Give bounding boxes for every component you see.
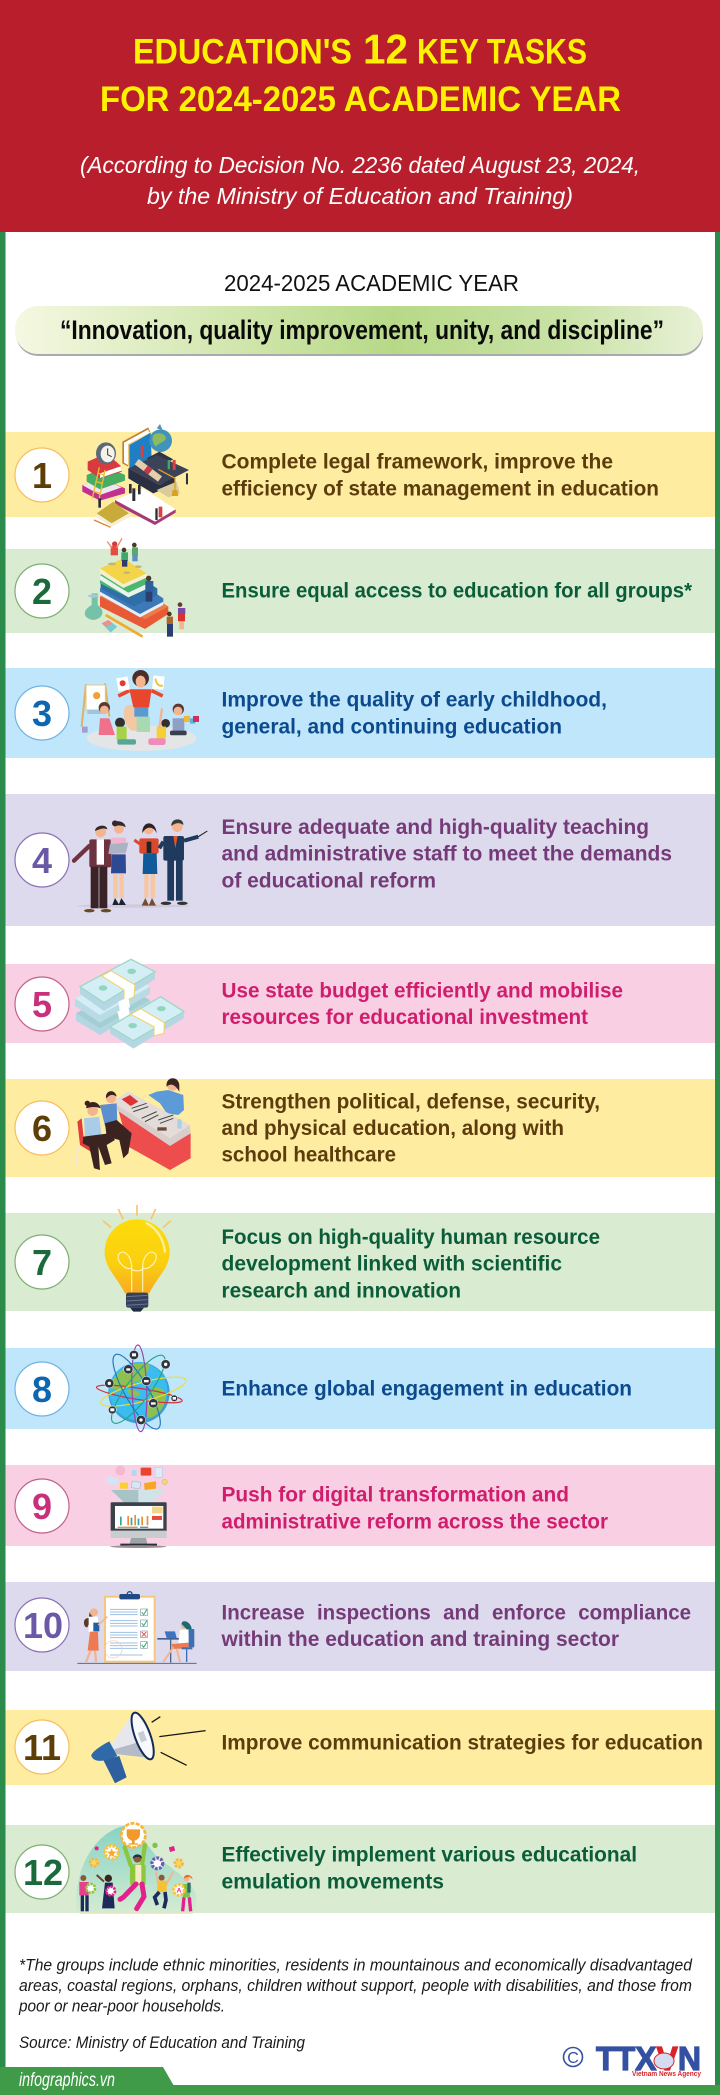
icon: teacher with children <box>82 670 199 751</box>
icon: megaphone <box>91 1710 206 1783</box>
number 3 <box>15 686 69 740</box>
site name: infographics.vn <box>19 2070 115 2091</box>
source: Source: Ministry of Education and Training <box>19 2033 305 2052</box>
footnote: poor or near-poor households. <box>18 1997 225 2016</box>
footnote <box>18 1956 693 2016</box>
subtitle: (According to Decision No. 2236 dated August 23, 2024, <box>80 152 640 178</box>
subtitle <box>80 152 640 209</box>
panel: task 2 <box>6 538 715 637</box>
task 9 text: Push for digital transformation and <box>222 1483 569 1507</box>
task 12 text <box>222 1843 637 1893</box>
panel: task 7 <box>6 1205 715 1312</box>
panel: task 3 <box>6 668 715 758</box>
task 6 text: school healthcare <box>222 1143 396 1167</box>
number 2: 2 <box>32 571 52 612</box>
number 5 <box>15 977 69 1031</box>
title <box>100 26 621 119</box>
task 10 text: within the education and training sector <box>221 1627 620 1651</box>
panel: task 8 <box>6 1345 715 1434</box>
panel: task 5 <box>6 959 715 1049</box>
task 4 text <box>222 815 672 892</box>
task 3 text <box>222 688 607 738</box>
panel: task 4 <box>6 794 715 926</box>
task 1 text: efficiency of state management in education <box>222 476 659 500</box>
number 4 <box>15 833 69 887</box>
task 9 text <box>222 1483 609 1533</box>
icon: stacks of money <box>75 959 184 1049</box>
task 6 text: and physical education, along with <box>222 1116 564 1140</box>
logo: TTXVN: C <box>567 2050 579 2067</box>
icon: students celebrating with trophy: A <box>177 1887 182 1894</box>
icon: light bulb <box>103 1205 171 1312</box>
task 9 text: administrative reform across the sector <box>222 1509 609 1533</box>
task 10 text: Increase inspections and enforce compliance <box>222 1600 691 1624</box>
logo: TTXVN: TTXVN <box>596 2040 701 2077</box>
task 7 text: Focus on high-quality human resource <box>222 1225 600 1249</box>
panel: task 11 <box>6 1710 715 1785</box>
number 1: 1 <box>32 455 52 496</box>
icon: stacked books and children <box>85 538 185 637</box>
logo: TTXVN: Vietnam News Agency <box>632 2069 702 2078</box>
title: 12 <box>363 26 408 72</box>
task 12 text: emulation movements <box>222 1869 444 1893</box>
panel: task 1 <box>6 424 715 527</box>
number 3: 3 <box>32 693 52 734</box>
icon: students celebrating with trophy <box>76 1823 197 1914</box>
icon: books, clock and globe <box>82 424 189 527</box>
number 5: 5 <box>32 984 52 1025</box>
icon: data funnel and monitor <box>107 1466 167 1548</box>
task 4 text: Ensure adequate and high-quality teaching <box>222 815 649 839</box>
number 8: 8 <box>32 1369 52 1410</box>
icon: four teachers <box>74 819 207 912</box>
number 2 <box>15 564 69 618</box>
task 7 text <box>222 1225 600 1302</box>
task 5 text: Use state budget efficiently and mobilise <box>222 978 623 1002</box>
task 1 text: Complete legal framework, improve the <box>222 450 613 474</box>
task 6 text <box>222 1089 600 1167</box>
task 1 text <box>222 450 659 500</box>
motto pill <box>15 306 703 356</box>
task 4 text: of educational reform <box>222 868 436 892</box>
task 3 text: Improve the quality of early childhood, <box>222 688 607 712</box>
number 6: 6 <box>32 1108 52 1149</box>
number 8 <box>15 1362 69 1416</box>
task 3 text: general, and continuing education <box>222 714 562 738</box>
panel: task 12 <box>6 1823 715 1914</box>
number 6 <box>15 1101 69 1155</box>
icon: people at a health desk <box>76 1078 191 1170</box>
number 9: 9 <box>32 1486 52 1527</box>
panel: task 10 <box>6 1582 715 1671</box>
icon: checklist with two women <box>77 1592 197 1663</box>
bottom bar with site tab <box>0 2067 720 2095</box>
title: FOR 2024-2025 ACADEMIC YEAR <box>100 80 621 119</box>
number 4: 4 <box>32 840 52 881</box>
number 7: 7 <box>32 1242 52 1283</box>
task 7 text: development linked with scientific <box>222 1252 562 1276</box>
subtitle: by the Ministry of Education and Training) <box>147 183 573 209</box>
task 5 text: resources for educational investment <box>222 1005 588 1029</box>
number 11: 11 <box>23 1727 61 1768</box>
right border <box>715 232 720 2095</box>
task 8 text: Enhance global engagement in education <box>222 1376 632 1400</box>
task 10 text <box>221 1600 691 1651</box>
title: KEY TASKS <box>417 32 587 72</box>
icon: globe with orbits <box>96 1345 188 1434</box>
left border <box>0 232 6 2095</box>
task 4 text: and administrative staff to meet the demands <box>222 842 672 866</box>
number 10: 10 <box>23 1605 63 1646</box>
task 7 text: research and innovation <box>222 1278 461 1302</box>
panel: task 6 <box>6 1078 715 1177</box>
number 10 <box>15 1598 69 1652</box>
task 12 text: Effectively implement various educational <box>222 1843 637 1867</box>
number 9 <box>15 1479 69 1533</box>
task 11 text: Improve communication strategies for education <box>222 1730 703 1754</box>
number 12: 12 <box>23 1852 63 1893</box>
title: EDUCATION'S <box>133 32 352 72</box>
number 11 <box>15 1720 69 1774</box>
academic year heading: 2024-2025 ACADEMIC YEAR <box>224 270 519 296</box>
panel: task 9 <box>6 1465 715 1548</box>
number 1 <box>15 448 69 502</box>
number 7 <box>15 1235 69 1289</box>
header panel <box>0 0 720 232</box>
task 5 text <box>222 978 623 1029</box>
task 6 text: Strengthen political, defense, security, <box>222 1089 600 1113</box>
task 2 text: Ensure equal access to education for all groups* <box>222 579 693 603</box>
number 12 <box>15 1845 69 1899</box>
